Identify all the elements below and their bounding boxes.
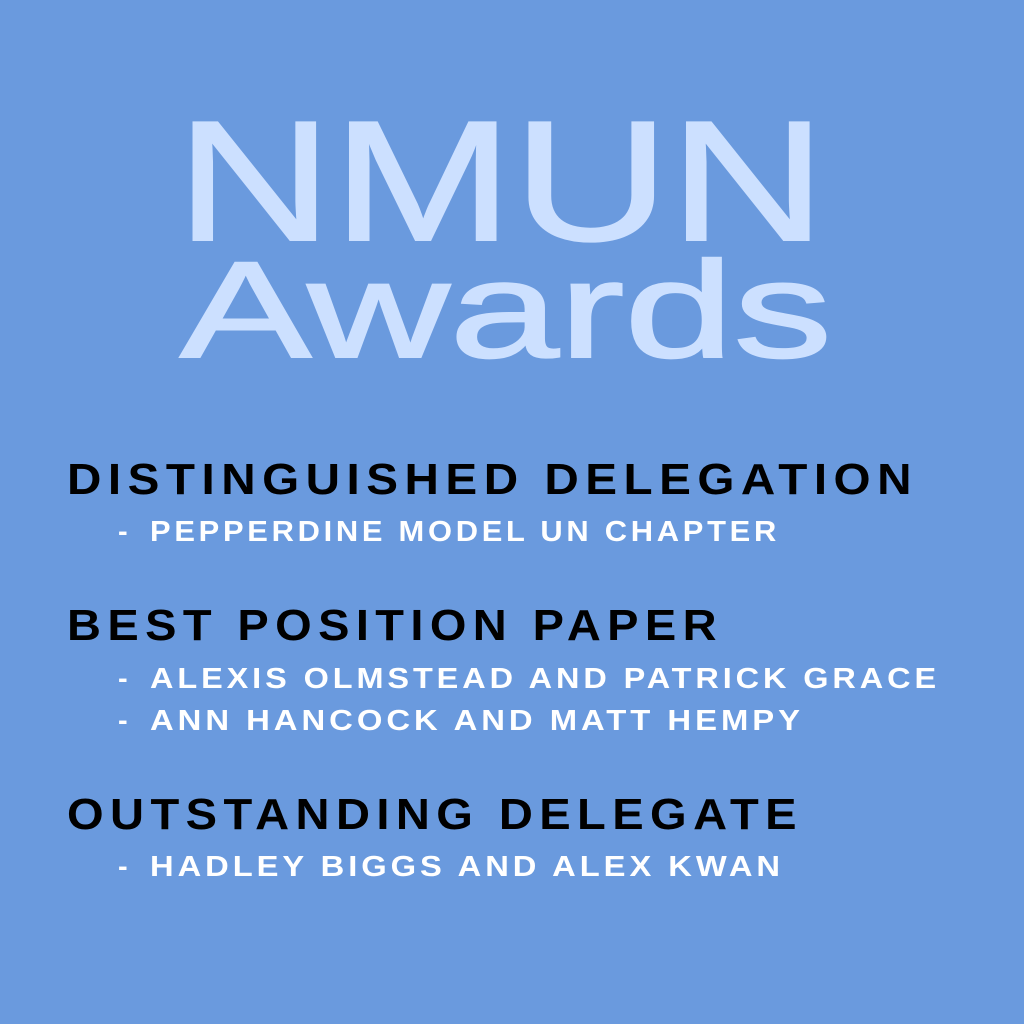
section: best position paper: ALEXIS OLMSTEAD AND PATRICK GRACE [150, 663, 940, 695]
title [176, 86, 832, 387]
section: outstanding delegate [67, 790, 803, 883]
section: best position paper: - [118, 705, 131, 737]
section: outstanding delegate: - [118, 851, 131, 883]
section: best position paper [67, 601, 940, 737]
section: best position paper: - [118, 663, 131, 695]
section: distinguished delegation: - [118, 516, 131, 548]
section: distinguished delegation [67, 455, 918, 548]
section: best position paper: BEST POSITION PAPER [67, 601, 723, 650]
section: distinguished delegation: DISTINGUISHED DELEGATION [67, 455, 918, 504]
section: outstanding delegate: HADLEY BIGGS AND ALEX KWAN [150, 851, 784, 883]
section: outstanding delegate: OUTSTANDING DELEGATE [67, 790, 803, 839]
section: distinguished delegation: PEPPERDINE MODEL UN CHAPTER [150, 516, 780, 548]
section: best position paper: ANN HANCOCK AND MATT HEMPY [150, 705, 804, 737]
title: Awards [180, 234, 832, 387]
title: NMUN [176, 86, 826, 277]
